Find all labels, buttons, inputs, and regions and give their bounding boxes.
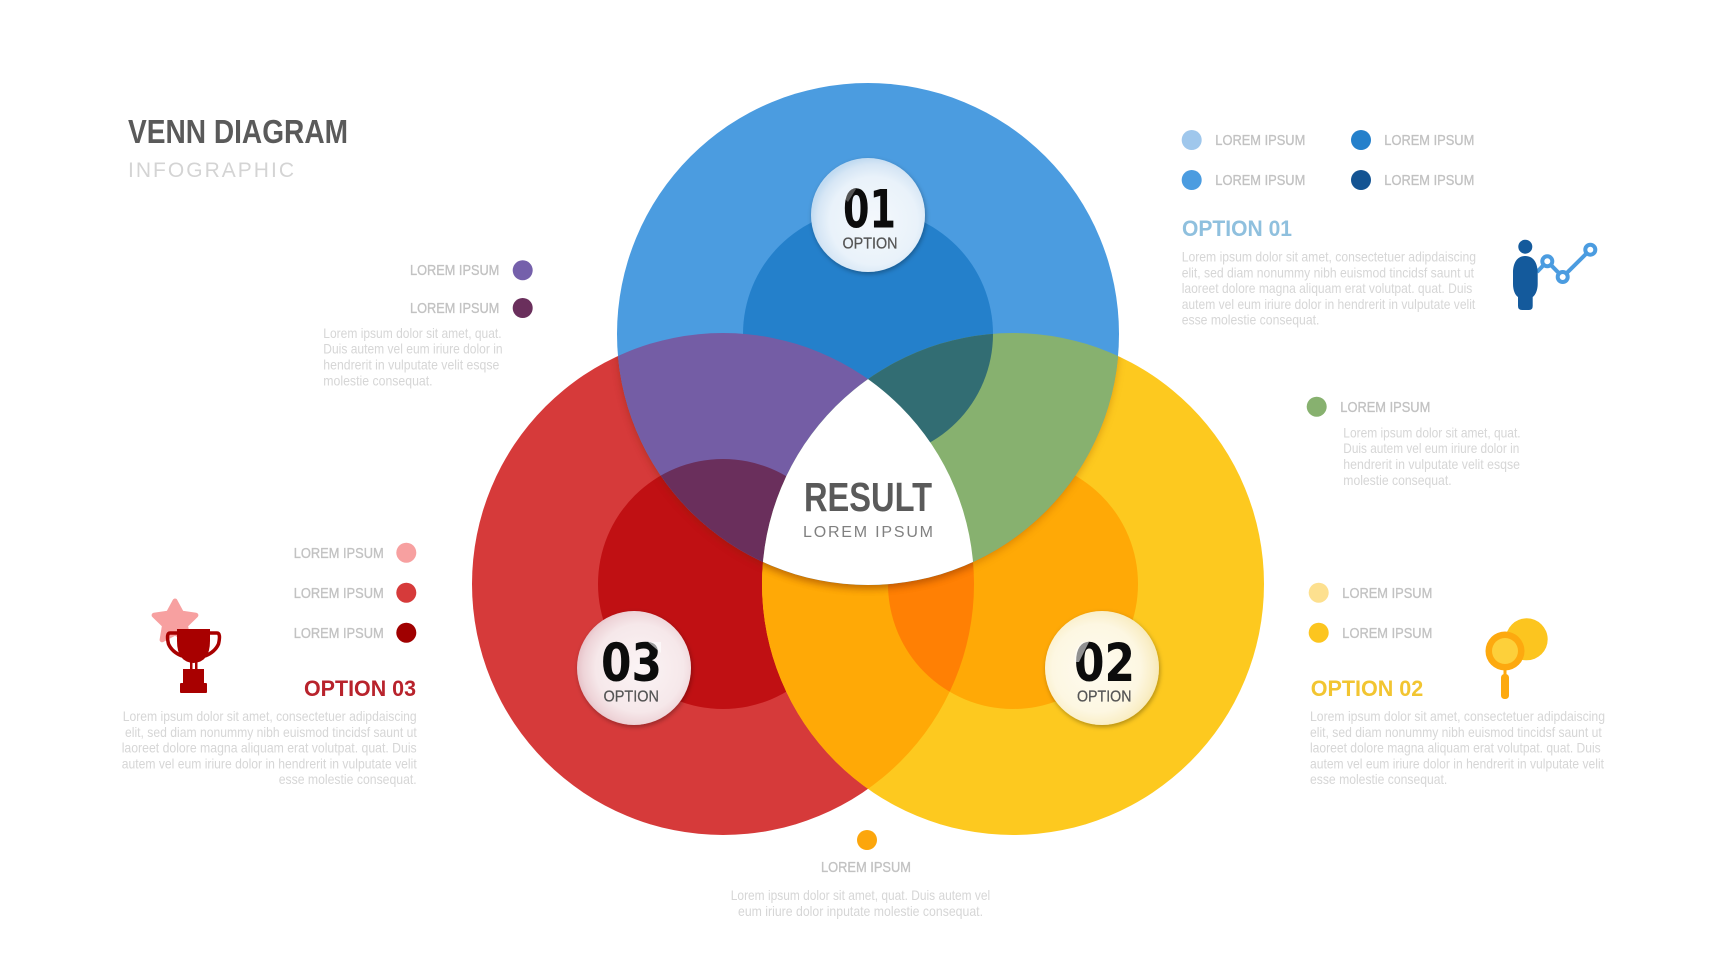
badge 03	[577, 611, 691, 725]
circle: option 01 blue	[617, 83, 1119, 585]
text block: option 01: laoreet dolore magna aliquam erat volutpat. quat. Duis	[1182, 280, 1472, 296]
legend: option 02: LOREM IPSUM	[1342, 585, 1432, 602]
text block: option 02	[1310, 676, 1605, 787]
overlap: blue and yellow	[763, 333, 1118, 585]
badge 02: 02	[1074, 633, 1135, 694]
badge 02	[1045, 611, 1159, 725]
legend: option 03: LOREM IPSUM	[294, 545, 384, 562]
legend: option 01	[1182, 130, 1474, 190]
legend and text: purple overlap	[323, 260, 533, 388]
circle: option 03 red	[472, 333, 974, 835]
text block: option 03: Lorem ipsum dolor sit amet, consectetuer adipdaiscing	[123, 708, 417, 724]
legend: option 03: LOREM IPSUM	[294, 625, 384, 642]
badge 01	[811, 158, 925, 272]
badge 03: OPTION	[604, 688, 659, 706]
legend: option 01: LOREM IPSUM	[1384, 172, 1474, 189]
legend: option 03: LOREM IPSUM	[294, 585, 384, 602]
overlap: red and yellow	[762, 562, 974, 789]
legend: option 01: LOREM IPSUM	[1384, 132, 1474, 149]
legend and text: orange overlap	[731, 830, 990, 919]
badge 02: OPTION	[1077, 688, 1132, 706]
text block: option 01: esse molestie consequat.	[1182, 312, 1319, 328]
text block: option 03: autem vel eum iriure dolor in hendrerit in vulputate velit	[122, 755, 417, 771]
text block: option 02: Lorem ipsum dolor sit amet, consectetuer adipdaiscing	[1310, 708, 1605, 724]
legend and text: orange overlap: LOREM IPSUM	[821, 859, 911, 876]
badge 01: OPTION	[842, 236, 898, 252]
text block: option 02: autem vel eum iriure dolor in hendrerit in vulputate velit	[1310, 755, 1604, 771]
icon: person with chart	[1513, 240, 1595, 310]
legend and text: green overlap: molestie consequat.	[1343, 472, 1452, 488]
text block: option 03: esse molestie consequat.	[279, 771, 417, 787]
legend and text: green overlap: hendrerit in vulputate velit esqse	[1343, 456, 1520, 472]
text block: option 03	[122, 676, 417, 787]
text block: option 01: OPTION 01	[1182, 216, 1292, 241]
overlap: blue and red	[618, 333, 973, 585]
text block: option 01: elit, sed diam nonummy nibh euismod tincidsf saunt ut	[1182, 264, 1474, 280]
legend and text: green overlap: Lorem ipsum dolor sit amet, quat.	[1343, 424, 1521, 440]
result label	[803, 474, 933, 541]
legend and text: purple overlap: hendrerit in vulputate velit esqse	[323, 356, 499, 372]
result label: RESULT	[804, 474, 932, 520]
result region	[763, 379, 973, 585]
icon: trophy and star	[154, 601, 219, 693]
legend and text: purple overlap: molestie consequat.	[323, 372, 433, 388]
legend: option 01: LOREM IPSUM	[1215, 172, 1305, 189]
text block: option 01: autem vel eum iriure dolor in hendrerit in vulputate velit	[1182, 296, 1475, 312]
icon: magnifier	[1486, 618, 1548, 699]
text block: option 01	[1182, 216, 1476, 328]
legend and text: green overlap: Duis autem vel eum iriure dolor in	[1343, 440, 1519, 456]
title: VENN DIAGRAM	[128, 113, 348, 150]
legend and text: purple overlap: Lorem ipsum dolor sit amet, quat.	[323, 325, 502, 341]
legend and text: purple overlap: LOREM IPSUM	[410, 262, 499, 279]
badge 01: 01	[843, 180, 896, 240]
legend and text: green overlap	[1307, 397, 1521, 488]
legend: option 03	[294, 543, 416, 643]
text block: option 02: laoreet dolore magna aliquam erat volutpat. quat. Duis	[1310, 740, 1601, 756]
legend: option 02	[1309, 583, 1432, 643]
legend and text: purple overlap: Duis autem vel eum iriure dolor in	[323, 341, 503, 357]
legend and text: green overlap: LOREM IPSUM	[1340, 399, 1430, 416]
text block: option 03: OPTION 03	[304, 676, 416, 701]
title	[128, 113, 348, 182]
text block: option 02: OPTION 02	[1311, 676, 1423, 701]
text block: option 01: Lorem ipsum dolor sit amet, consectetuer adipdaiscing	[1182, 248, 1476, 264]
text block: option 03: elit, sed diam nonummy nibh euismod tincidsf saunt ut	[125, 724, 417, 740]
result label: LOREM IPSUM	[803, 524, 933, 541]
text block: option 02: elit, sed diam nonummy nibh euismod tincidsf saunt ut	[1310, 724, 1602, 740]
badge 03: 03	[601, 633, 662, 694]
text block: option 02: esse molestie consequat.	[1310, 771, 1447, 787]
circle: option 02 yellow	[762, 333, 1264, 835]
legend: option 02: LOREM IPSUM	[1342, 625, 1432, 642]
legend: option 01: LOREM IPSUM	[1215, 132, 1305, 149]
title: INFOGRAPHIC	[128, 159, 294, 182]
venn diagram	[472, 83, 1264, 835]
legend and text: orange overlap: eum iriure dolor inputate molestie consequat.	[738, 903, 983, 919]
text block: option 03: laoreet dolore magna aliquam erat volutpat. quat. Duis	[122, 740, 417, 756]
legend and text: purple overlap: LOREM IPSUM	[410, 300, 499, 317]
legend and text: orange overlap: Lorem ipsum dolor sit amet, quat. Duis autem vel	[731, 887, 990, 903]
